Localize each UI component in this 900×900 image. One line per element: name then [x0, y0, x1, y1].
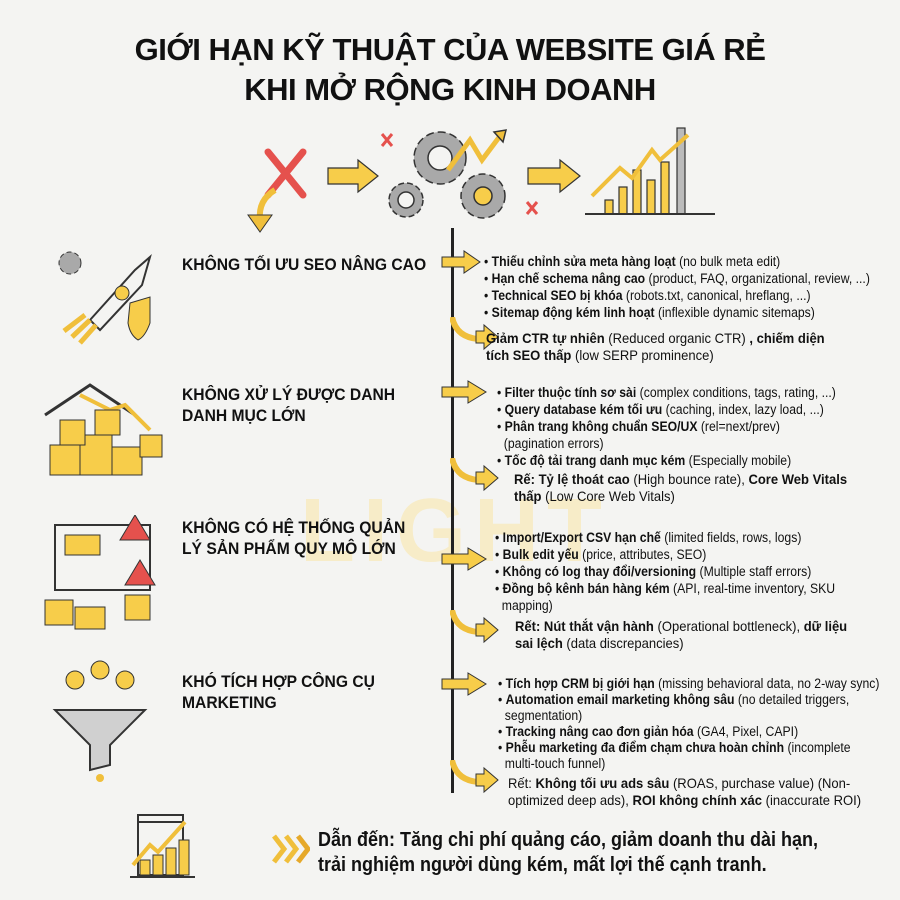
arrow result: [450, 760, 499, 793]
result: sai lệch (data discrepancies): [515, 635, 684, 651]
arrow result: [450, 610, 499, 643]
bullets: [498, 676, 879, 771]
bullets: (pagination errors): [504, 436, 604, 451]
result: thấp (Low Core Web Vitals): [514, 488, 675, 504]
bullets: • Automation email marketing không sâu (no detailed triggers,: [498, 692, 849, 707]
result: Giảm CTR tự nhiên (Reduced organic CTR) , chiếm diện: [486, 330, 825, 346]
bullets: • Import/Export CSV hạn chế (limited fields, rows, logs): [495, 530, 801, 545]
heading: KHÔNG TỐI ƯU SEO NÂNG CAO: [182, 255, 426, 274]
heading: [182, 672, 375, 712]
bullets: • Tracking nâng cao đơn giản hóa (GA4, Pixel, CAPI): [498, 724, 798, 739]
heading: MARKETING: [182, 693, 277, 712]
result: [508, 775, 861, 808]
panel: marketing: [52, 660, 879, 808]
bullets: mapping): [502, 598, 553, 613]
bullets: • Không có log thay đổi/versioning (Multiple staff errors): [495, 564, 811, 579]
result: Rế: Tỷ lệ thoát cao (High bounce rate), Core Web Vitals: [514, 471, 847, 487]
arrow: down curve: [248, 190, 275, 232]
result: Rết: Nút thắt vận hành (Operational bottleneck), dữ liệu: [515, 618, 847, 634]
bullets: • Hạn chế schema nâng cao (product, FAQ, organizational, review, ...): [484, 271, 870, 286]
bullets: segmentation): [505, 708, 582, 723]
arrow right 2: [528, 160, 580, 192]
panel: conclusion: [130, 814, 818, 878]
bullets: • Phễu marketing đa điểm chạm chưa hoàn chỉnh (incomplete: [498, 740, 851, 755]
bullets: • Tích hợp CRM bị giới hạn (missing behavioral data, no 2-way sync): [498, 676, 879, 691]
watermark: LIGHT: [300, 481, 610, 581]
heading: DANH MỤC LỚN: [182, 406, 306, 425]
heading: KHÔNG CÓ HỆ THỐNG QUẢN: [182, 518, 405, 537]
result: [514, 471, 847, 504]
heading: [182, 385, 395, 425]
heading: KHÔNG XỬ LÝ ĐƯỢC DANH: [182, 385, 395, 404]
arrow in: [442, 250, 481, 274]
panel: products: [44, 515, 847, 651]
top illustration: [247, 127, 715, 233]
arrow in: [442, 380, 487, 404]
bullets: • Đồng bộ kênh bán hàng kém (API, real-time inventory, SKU: [495, 581, 835, 596]
icon: growth chart: [585, 128, 715, 214]
bullets: • Filter thuộc tính sơ sài (complex conditions, tags, rating, ...): [497, 385, 836, 400]
result: optimized deep ads), ROI không chính xác (inaccurate ROI): [508, 792, 861, 808]
title: [135, 32, 765, 107]
result: [486, 330, 825, 363]
result: Rết: Không tối ưu ads sâu (ROAS, purchase value) (Non-: [508, 775, 850, 791]
arrow in: [442, 672, 487, 696]
icon: boxes: [44, 383, 162, 476]
heading: KHÓ TÍCH HỢP CÔNG CỤ: [182, 672, 375, 691]
bullets: • Sitemap động kém linh hoạt (inflexible dynamic sitemaps): [484, 305, 815, 320]
bullets: • Tốc độ tải trang danh mục kém (Especially mobile): [497, 453, 791, 468]
heading: [182, 518, 405, 558]
icon: funnel: [52, 660, 148, 782]
timeline line: [451, 228, 454, 793]
arrow result: [450, 458, 499, 491]
arrow in: [442, 547, 487, 571]
conclusion text: Dẫn đến: Tăng chi phí quảng cáo, giảm doanh thu dài hạn,: [318, 829, 818, 851]
arrow result: [450, 317, 499, 350]
bullets: • Query database kém tối ưu (caching, index, lazy load, ...): [497, 402, 824, 417]
bullets: [484, 254, 870, 320]
title: GIỚI HẠN KỸ THUẬT CỦA WEBSITE GIÁ RẺ: [135, 32, 765, 67]
conclusion text: [318, 828, 818, 876]
bullets: • Phân trang không chuẩn SEO/UX (rel=next/prev): [497, 419, 780, 434]
result: [515, 618, 847, 651]
conclusion text: trải nghiệm người dùng kém, mất lợi thế cạnh tranh.: [318, 854, 767, 876]
bullets: [497, 385, 836, 468]
icon: computer warning: [44, 515, 156, 630]
panel: SEO: [58, 250, 870, 363]
title: KHI MỞ RỘNG KINH DOANH: [244, 72, 656, 107]
icon: chevrons: [272, 834, 310, 864]
bullets: multi-touch funnel): [505, 756, 605, 771]
result: tích SEO thấp (low SERP prominence): [486, 347, 714, 363]
icon: gears: [389, 130, 506, 218]
heading: LÝ SẢN PHẨM QUY MÔ LỚN: [182, 539, 396, 558]
icon: red x: [268, 152, 303, 195]
bullets: • Bulk edit yếu (price, attributes, SEO): [495, 547, 706, 562]
arrow right 1: [328, 160, 378, 192]
icon: growth window: [130, 814, 195, 878]
panel: categories: [44, 380, 847, 504]
icon: rocket: [58, 252, 152, 345]
bullets: [495, 530, 835, 613]
bullets: • Thiếu chỉnh sửa meta hàng loạt (no bulk meta edit): [484, 254, 780, 269]
bullets: • Technical SEO bị khóa (robots.txt, canonical, hreflang, ...): [484, 288, 811, 303]
